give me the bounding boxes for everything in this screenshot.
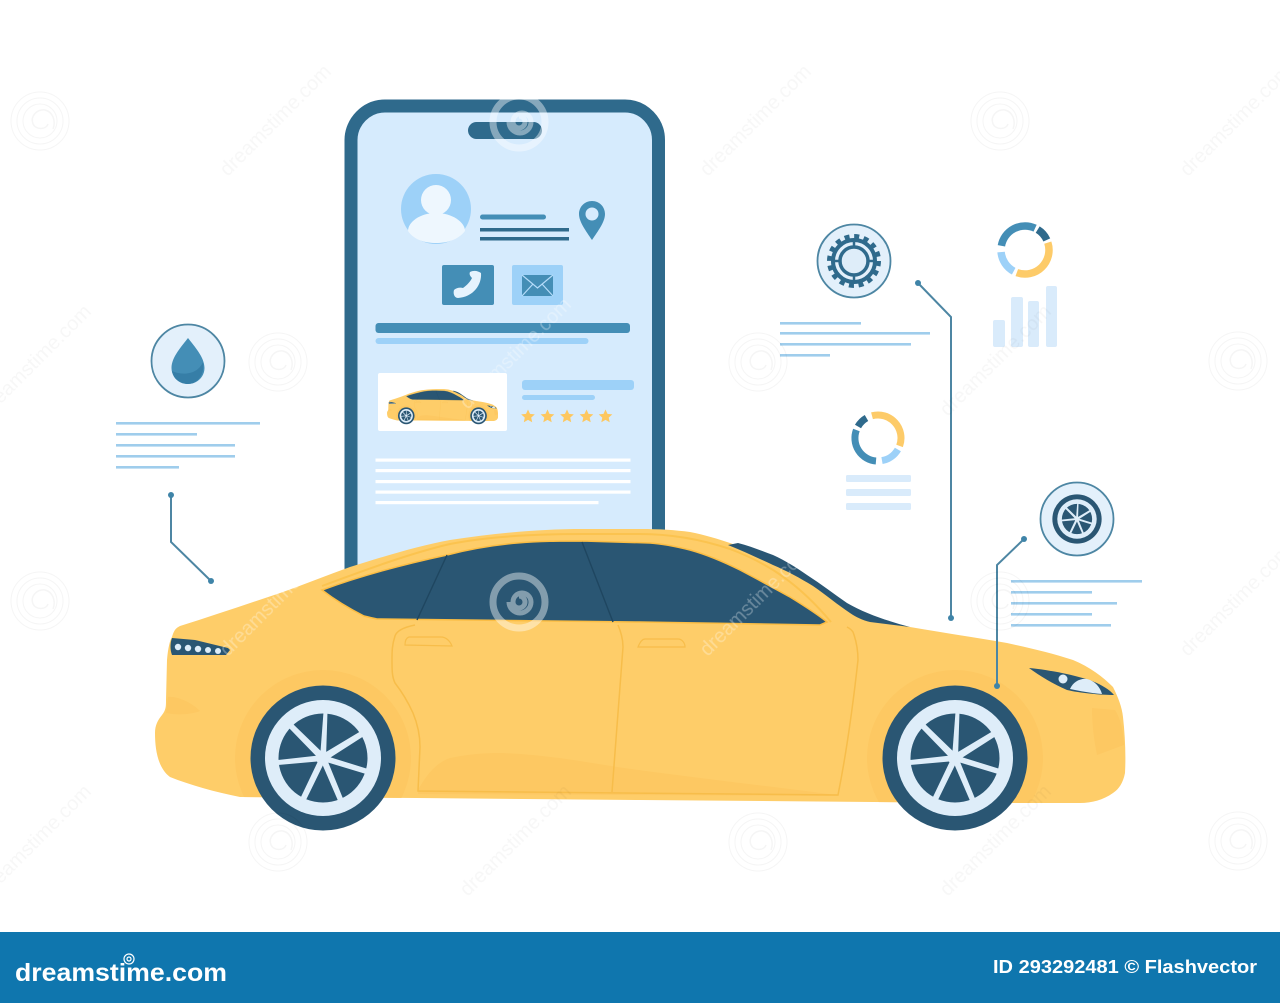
icon: gear (818, 224, 890, 298)
text lines (780, 322, 930, 357)
connector line (915, 280, 954, 621)
profile avatar (401, 174, 471, 244)
footer bar (0, 932, 1280, 1003)
panel: fluid indicator (116, 324, 260, 584)
icon: location pin (579, 201, 605, 240)
phone body (351, 106, 658, 600)
icon: tire (1040, 482, 1114, 556)
car listing card (378, 373, 507, 431)
logo spiral (124, 954, 134, 964)
watermark overlay: dreamstime.com (216, 541, 336, 661)
icon: water drop (152, 324, 224, 398)
chart: donut and bars (993, 226, 1057, 347)
section heading bars (376, 323, 630, 344)
icon: mail button (512, 265, 563, 305)
watermark overlay: dreamstime.com (696, 61, 816, 181)
mini car (387, 389, 498, 426)
watermark overlay: dreamstime.com (696, 541, 816, 661)
footer logo: dreamstime.com (15, 959, 227, 987)
watermark overlay: dreamstime.com (456, 294, 576, 414)
description lines (376, 458, 630, 504)
connector line (168, 492, 214, 584)
donut chart (1001, 226, 1049, 274)
phone (351, 106, 658, 600)
profile text lines (480, 214, 569, 240)
yellow car (155, 529, 1125, 846)
donut chart (855, 415, 901, 461)
legend bars (846, 475, 911, 510)
listing title bars (522, 380, 634, 400)
icon: phone button (442, 265, 494, 305)
tire connector line (994, 536, 1027, 689)
bar chart (993, 286, 1057, 347)
watermark overlay: dreamstime.com (936, 301, 1056, 421)
watermark overlay: dreamstime.com (456, 781, 576, 901)
text lines (116, 422, 260, 469)
rating stars (521, 410, 612, 422)
panel: engine indicator (780, 224, 954, 621)
footer credit: ID 293292481 © Flashvector (993, 957, 1257, 977)
chart: small donut with legend (846, 415, 911, 510)
watermark overlay: dreamstime.com (936, 781, 1056, 901)
phone notch (468, 122, 542, 139)
panel: tire indicator (1011, 482, 1142, 627)
text lines (1011, 580, 1142, 627)
watermark overlay: dreamstime.com (216, 61, 336, 181)
